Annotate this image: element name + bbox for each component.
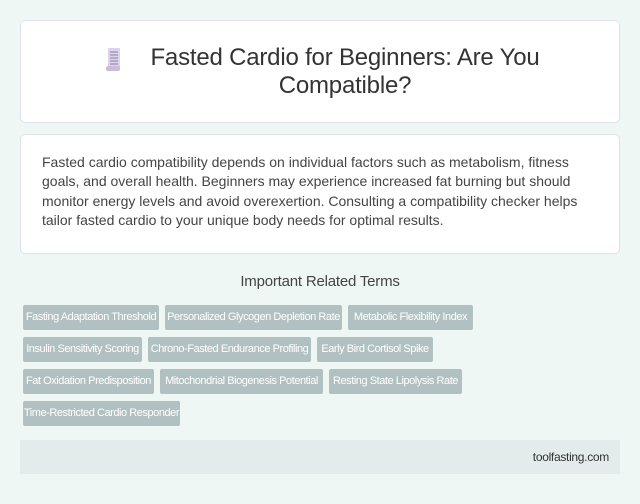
tags: Mitochondrial Biogenesis Potential	[165, 375, 318, 387]
footer text: toolfasting.com	[533, 450, 609, 464]
tags: Fasting Adaptation Threshold	[26, 311, 156, 323]
description text: tailor fasted cardio to your unique body needs for optimal results.	[42, 212, 444, 228]
description text: Fasted cardio compatibility depends on individual factors such as metabolism, fitness	[42, 154, 569, 170]
description text: goals, and overall health. Beginners may experience increased fat burning but should	[42, 173, 570, 189]
tags	[23, 305, 473, 426]
footer	[20, 440, 620, 474]
tags: Personalized Glycogen Depletion Rate	[167, 311, 340, 323]
title text: Compatible?	[279, 72, 411, 99]
tags: Chrono-Fasted Endurance Profiling	[151, 343, 308, 355]
tags: Metabolic Flexibility Index	[354, 311, 467, 323]
tags: Insulin Sensitivity Scoring	[26, 343, 139, 355]
tags: Time-Restricted Cardio Responder	[24, 407, 179, 419]
tags: Resting State Lipolysis Rate	[333, 375, 458, 387]
description text	[42, 154, 577, 228]
panel: description	[20, 134, 620, 254]
panel: title	[20, 20, 620, 123]
title text: Fasted Cardio for Beginners: Are You	[150, 44, 540, 71]
tags: Fat Oxidation Predisposition	[26, 375, 151, 387]
description text: monitor energy levels and avoid overexertion. Consulting a compatibility checker helps	[42, 193, 577, 209]
icon: document	[106, 48, 120, 71]
heading: related terms: Important Related Terms	[240, 273, 400, 290]
title text	[150, 44, 540, 99]
tags: Early Bird Cortisol Spike	[321, 343, 429, 355]
